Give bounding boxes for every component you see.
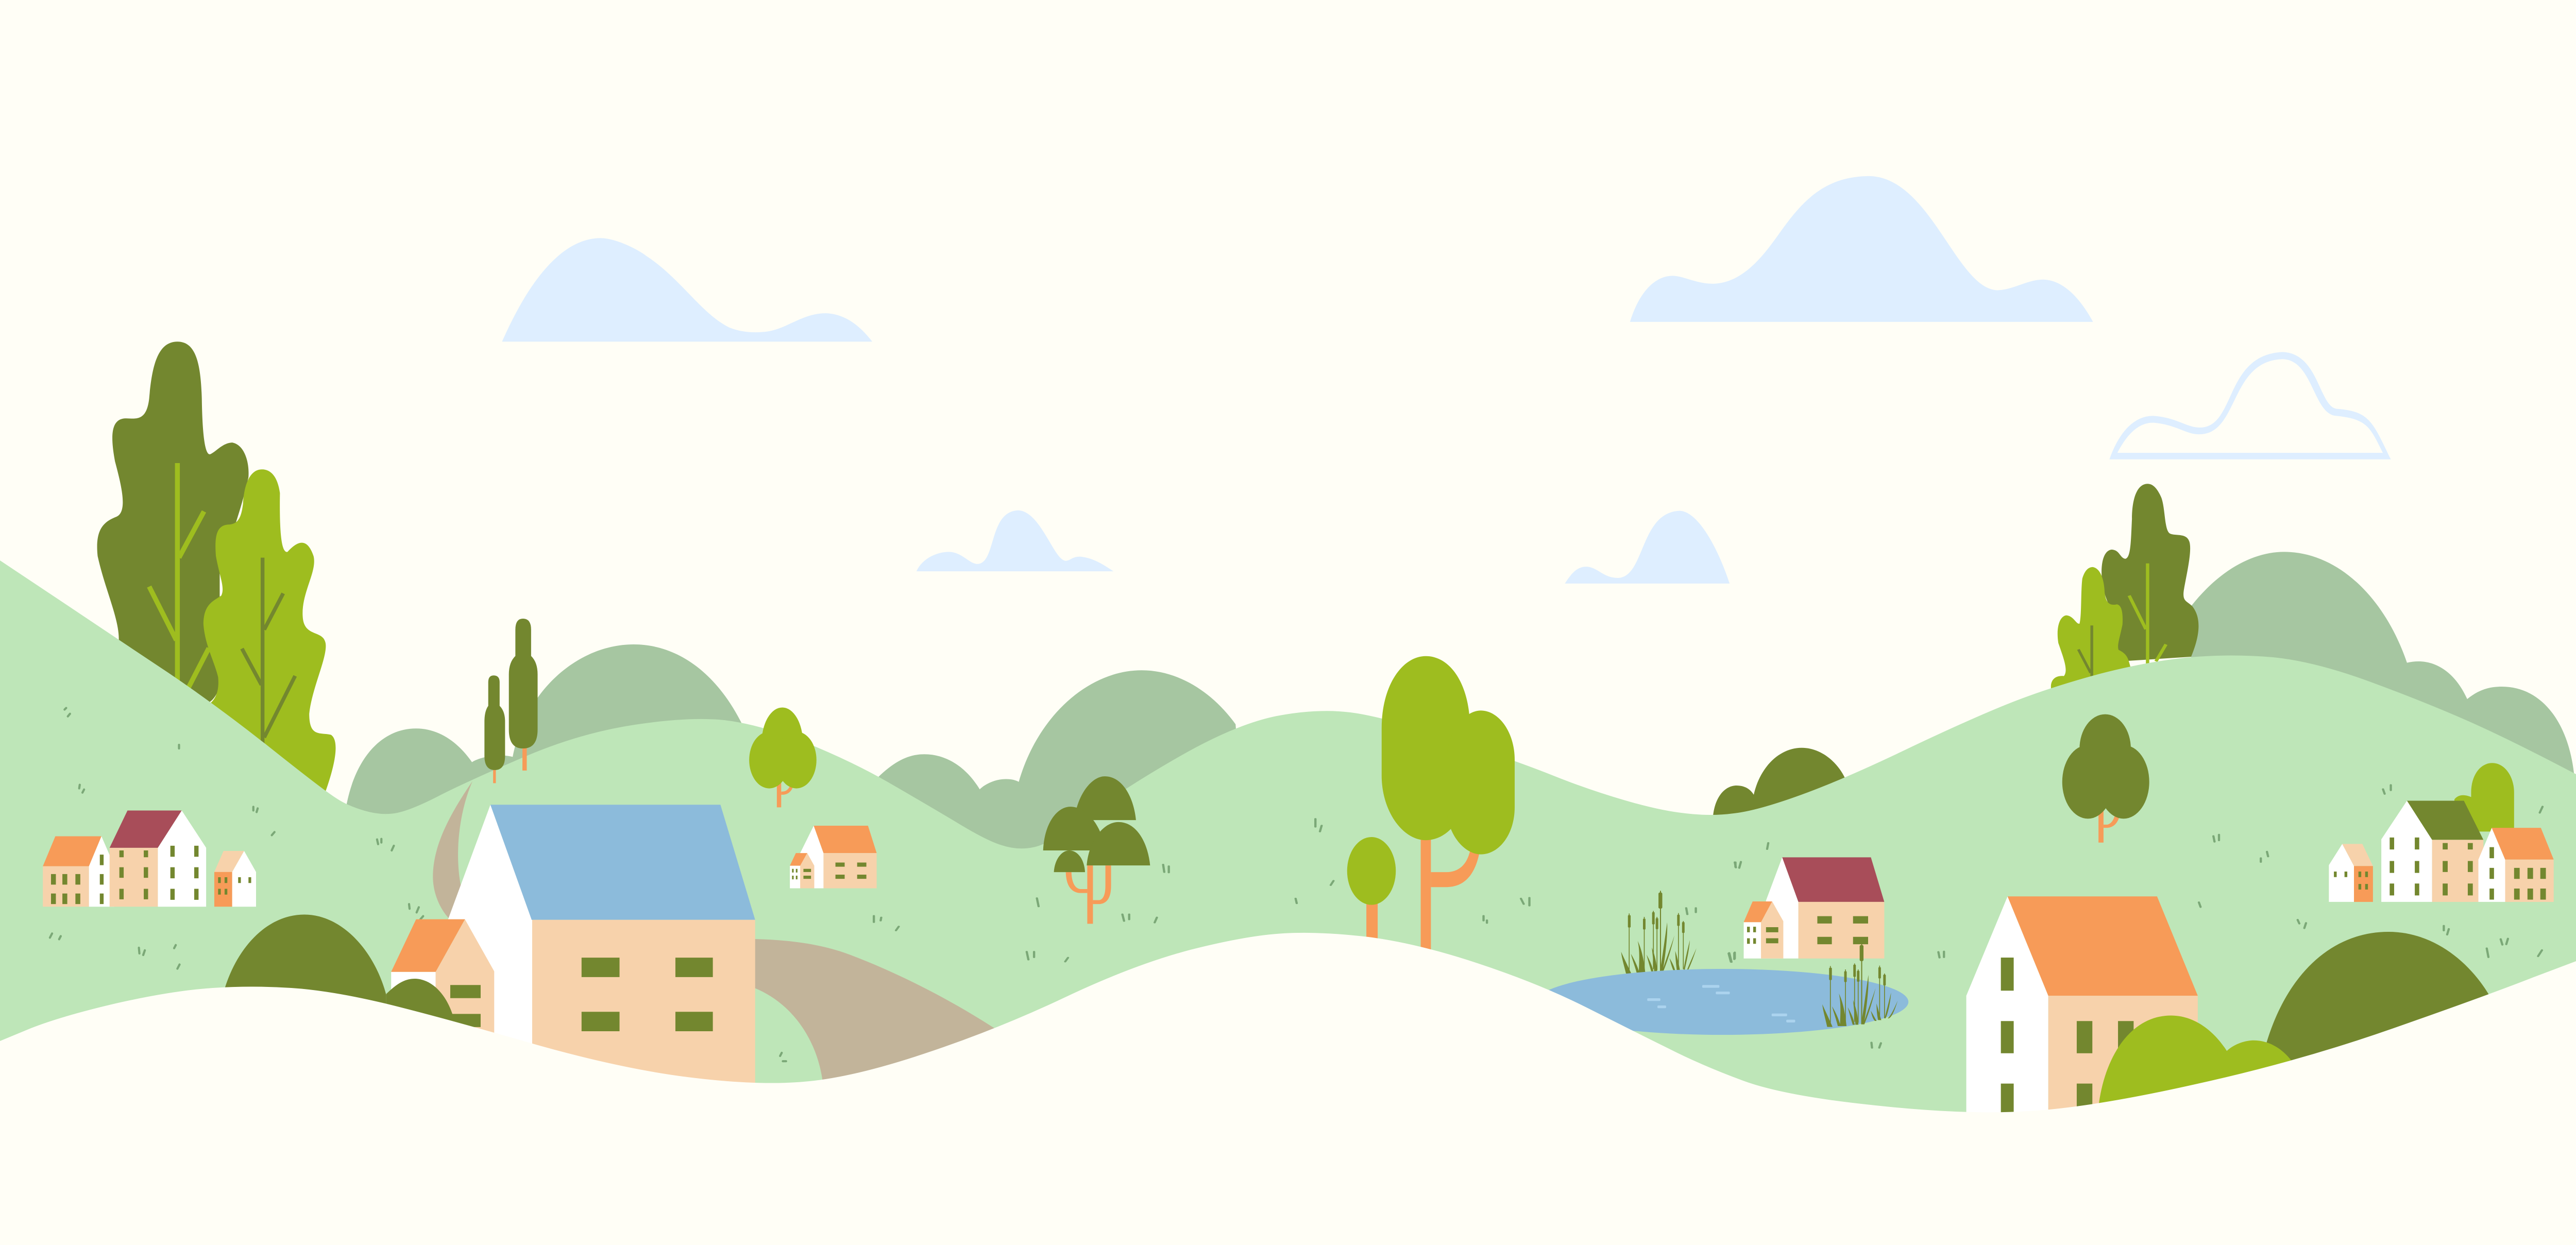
tree: large dark leaf tree, left (97, 342, 249, 703)
distant hills: left (345, 644, 742, 834)
tree: lime leaf tree, left (204, 469, 336, 792)
distant hills: centre (878, 670, 1247, 882)
house: dark green roof (2381, 800, 2483, 902)
shrubs behind the hill, centre right (1713, 748, 1845, 831)
reeds: in pond (1822, 943, 1897, 1027)
shrub: lime, front right (2098, 1015, 2294, 1112)
tree: dark leaf tree, right (2102, 484, 2198, 664)
house: small peach roof (2329, 844, 2373, 902)
tree: big lime double canopy (1382, 656, 1515, 953)
road behind big house (433, 781, 472, 919)
shrub: large dark, front right (2266, 932, 2489, 1071)
cloud: outlined (2109, 352, 2391, 459)
tree: short cypress (484, 675, 505, 783)
pond ripples (1647, 985, 1795, 1022)
house: orange roof beside big house (391, 919, 494, 1055)
shrub: large dark, front left (225, 915, 386, 1013)
houses: left village (43, 810, 256, 907)
reeds: behind pond (1621, 891, 1697, 974)
house: big orange roof, front right (1967, 896, 2198, 1131)
house: orange roof (43, 836, 114, 907)
houses: right village (2329, 763, 2554, 902)
tree: lime leaf tree, right (2051, 567, 2131, 693)
road right of big house (754, 939, 997, 1092)
houses: small pair behind road (790, 826, 877, 888)
grass tufts: left (50, 708, 786, 1061)
house: orange roof (2479, 828, 2554, 902)
tree: tall cypress (509, 619, 538, 771)
house: tiny orange roof by pond (1744, 901, 1783, 959)
tree: round dark tree on right hill (2062, 714, 2149, 843)
foreground cream hill (0, 933, 2576, 1245)
cloud: small right of centre (1565, 511, 1730, 584)
house: red roof (110, 810, 206, 907)
tree: umbrella tree (1043, 776, 1150, 924)
house: tiny orange roof (790, 853, 815, 888)
shrub: lime behind right village (2454, 763, 2514, 831)
cloud: small centre (917, 510, 1113, 571)
house: big blue roof (448, 805, 755, 1099)
distant hills: right (2191, 552, 2576, 878)
tree: small round lollipop (1347, 837, 1396, 941)
house: small peach roof (214, 851, 256, 907)
pond (1536, 969, 1908, 1035)
shrub: small dark, front left (386, 979, 453, 1055)
grass tufts: right (1728, 785, 2543, 1048)
cloud: upper left (502, 238, 872, 342)
main green hill (0, 560, 2576, 1245)
grass tufts: centre (874, 819, 1736, 962)
cloud: large upper right (1630, 176, 2093, 322)
tree: small round lime tree (749, 707, 817, 807)
house: orange roof far (800, 826, 877, 888)
house: red roof by pond (1760, 857, 1884, 959)
